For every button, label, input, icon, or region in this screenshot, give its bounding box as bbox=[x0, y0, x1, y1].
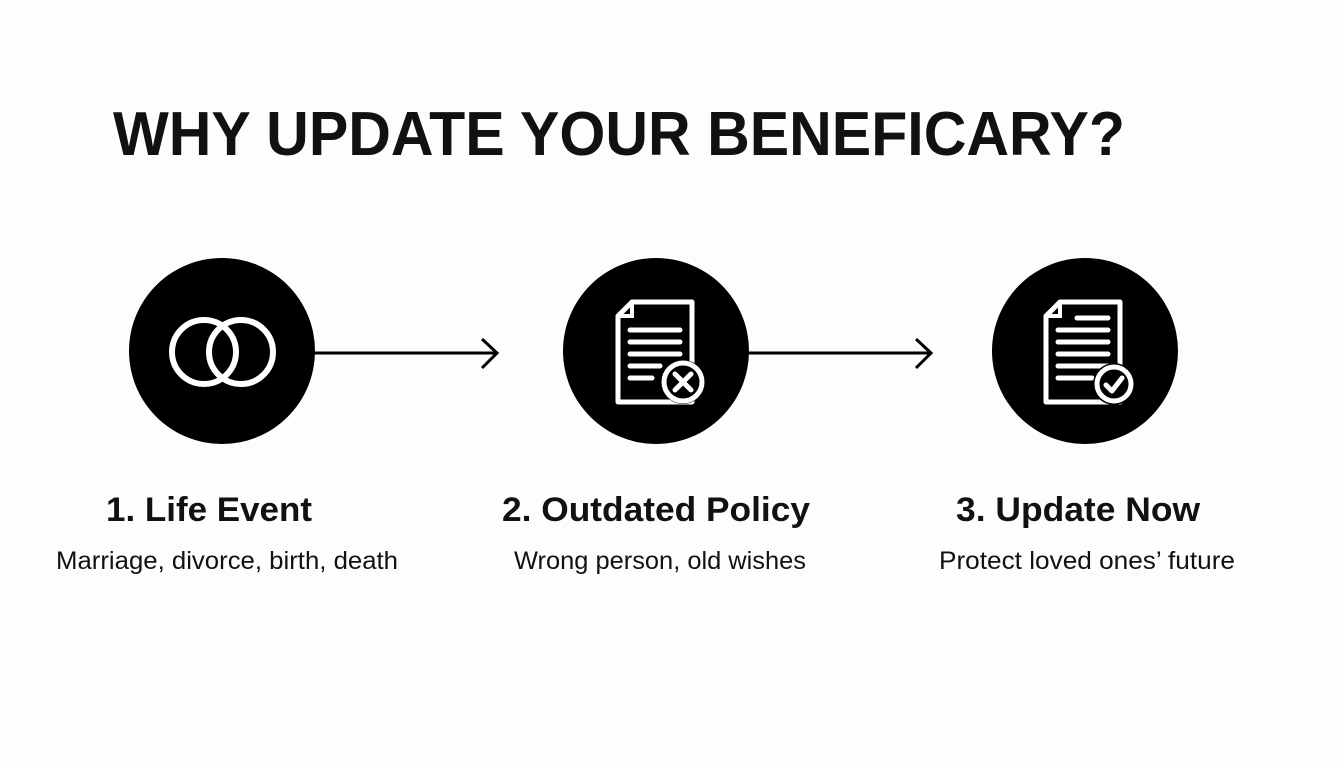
step 3: update now bbox=[939, 258, 1235, 575]
icon: document with check bbox=[992, 258, 1178, 444]
icon: rings bbox=[129, 258, 315, 444]
icon: document with x bbox=[563, 258, 749, 444]
heading 1: 1. Life Event bbox=[106, 491, 312, 529]
description 1: Marriage, divorce, birth, death bbox=[56, 547, 398, 575]
description 3: Protect loved ones’ future bbox=[939, 547, 1235, 575]
title: WHY UPDATE YOUR BENEFICARY? bbox=[113, 100, 1125, 169]
heading 3: 3. Update Now bbox=[956, 491, 1201, 529]
step 2: outdated policy bbox=[502, 258, 810, 575]
step 1: life event bbox=[56, 258, 398, 575]
heading 2: 2. Outdated Policy bbox=[502, 491, 810, 529]
description 2: Wrong person, old wishes bbox=[514, 547, 806, 575]
arrow 1 bbox=[312, 339, 497, 368]
arrow 2 bbox=[746, 339, 931, 368]
